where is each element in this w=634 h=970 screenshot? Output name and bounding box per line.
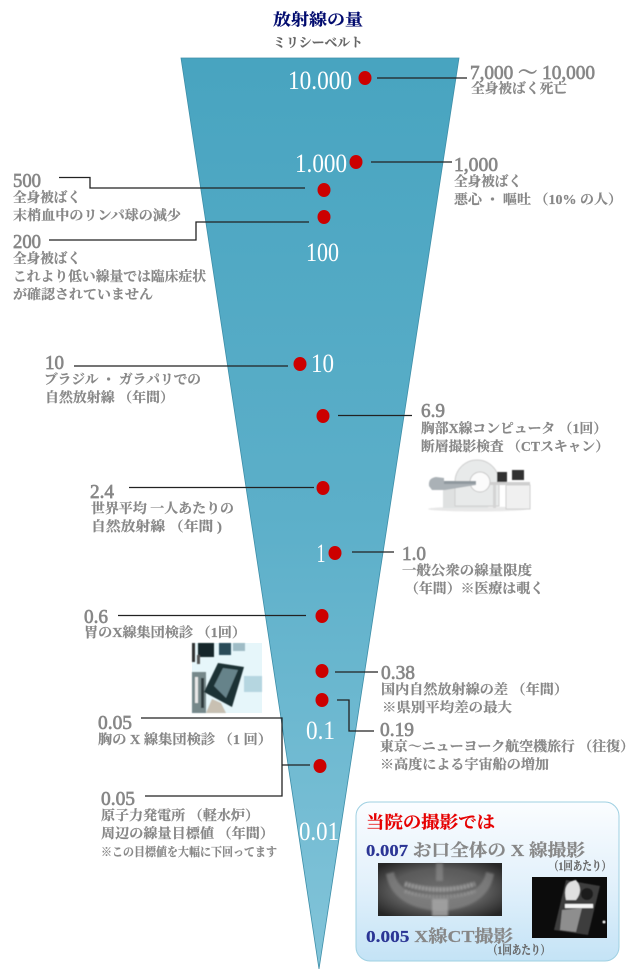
label: 0.05 nuclear plant: 0.05 [101,788,135,810]
label: 10: 10 [45,352,64,374]
label: 0.6: 胃のX線集団検診 （1回） [84,624,246,640]
scale labels: 10 [311,349,334,378]
icon: chest x-ray film photo [192,643,262,713]
label: 0.6 [84,606,246,640]
label: 1000: 全身被ばく [454,173,522,189]
label: 0.19: ※高度による宇宙船の増加 [380,756,549,772]
label: 500: 末梢血中のリンパ球の減少 [13,207,182,223]
label: 6.9: 胸部X線コンピュータ （1回） [421,420,607,436]
label: 0.05 chest: 胸の X 線集団検診 （1 回） [98,731,272,747]
label: 200: が確認されていません [13,287,153,302]
panoramic dose line: 0.007 お口全体の X 線撮影 [366,840,585,860]
scale labels: 1 [316,539,326,568]
label: 10 [44,352,201,405]
label: 200 [13,231,206,302]
label: 0.38: ※県別平均差の最大 [382,699,512,715]
label: 7000-10000: 7,000 ～ 10,000 [470,62,595,84]
leader lines [49,78,467,796]
label: 1000 [454,154,622,207]
funnel scale triangle [181,58,459,969]
label: 1.0: 一般公衆の線量限度 [402,562,532,579]
scale labels: 0.1 [306,716,335,745]
scale labels: 10.000 [288,66,352,95]
label: 10: 自然放射線 （年間） [45,389,174,405]
label: 1000: 1,000 [454,154,498,176]
scale labels: 0.01 [299,817,339,846]
label: 0.05 nuclear plant [101,788,277,859]
panel heading: 当院の撮影では [366,812,495,832]
per-exposure note 2: （1回あたり） [488,943,550,957]
label: 0.38: 国内自然放射線の差 （年間） [381,681,568,697]
dental CT image [532,877,607,938]
panel: this clinic's imaging [356,802,619,961]
label: 10: ブラジル ・ ガラパリでの [44,372,201,387]
label: 1.0: （年間）※医療は覗く [405,580,544,596]
label: 0.38 [381,662,568,715]
unit subtitle: ミリシーベルト [273,35,363,50]
panoramic x-ray image [378,863,502,916]
label: 6.9: 断層撮影検査 （CTスキャン） [421,438,609,454]
label: 2.4 [90,481,234,535]
label: 7000-10000: 全身被ばく死亡 [471,80,567,96]
per-exposure note 1: （1回あたり） [549,859,611,873]
label: 0.19: 東京～ニューヨーク航空機旅行 （往復） [380,738,634,754]
label: 6.9: 6.9 [421,400,445,422]
CT dose line: 0.005 X線CT撮影 [366,926,513,946]
label: 200: これより低い線量では臨床症状 [13,268,206,284]
title: 放射線の量 [273,10,363,29]
scale labels: 100 [306,238,339,267]
label: 500: 全身被ばく [13,189,81,205]
label: 2.4: 2.4 [90,481,114,503]
label: 500 [13,170,182,223]
label: 0.19: 0.19 [380,719,414,741]
icon: CT scanner [428,460,530,512]
label: 0.05 chest: 0.05 [98,712,132,734]
label: 6.9 [421,400,609,454]
label: 0.19 [380,719,634,772]
label: 500: 500 [13,170,41,192]
label: 1000: 悪心 ・ 嘔吐 （10% の人） [454,191,622,207]
scale labels [288,66,352,846]
label: 0.05 chest [98,712,272,747]
label: 200: 全身被ばく [13,250,81,266]
label: 0.6: 0.6 [84,606,108,628]
label: 1.0 [402,543,544,596]
label: 2.4: 世界平均 一人あたりの [91,500,234,516]
scale labels: 1.000 [295,149,347,178]
label: 1.0: 1.0 [402,543,426,565]
label: 0.05 nuclear plant: 周辺の線量目標値 （年間） [101,825,274,841]
label: 0.05 nuclear plant: 原子力発電所 （軽水炉） [101,807,259,823]
label: 0.38: 0.38 [381,662,415,684]
label: 2.4: 自然放射線 （年間 ) [91,518,222,535]
label: 0.05 nuclear plant: ※この目標値を大幅に下回ってます [101,844,277,859]
label: 7000-10000 [470,62,595,96]
label: 200: 200 [13,231,41,253]
dose marker dots [294,71,372,773]
